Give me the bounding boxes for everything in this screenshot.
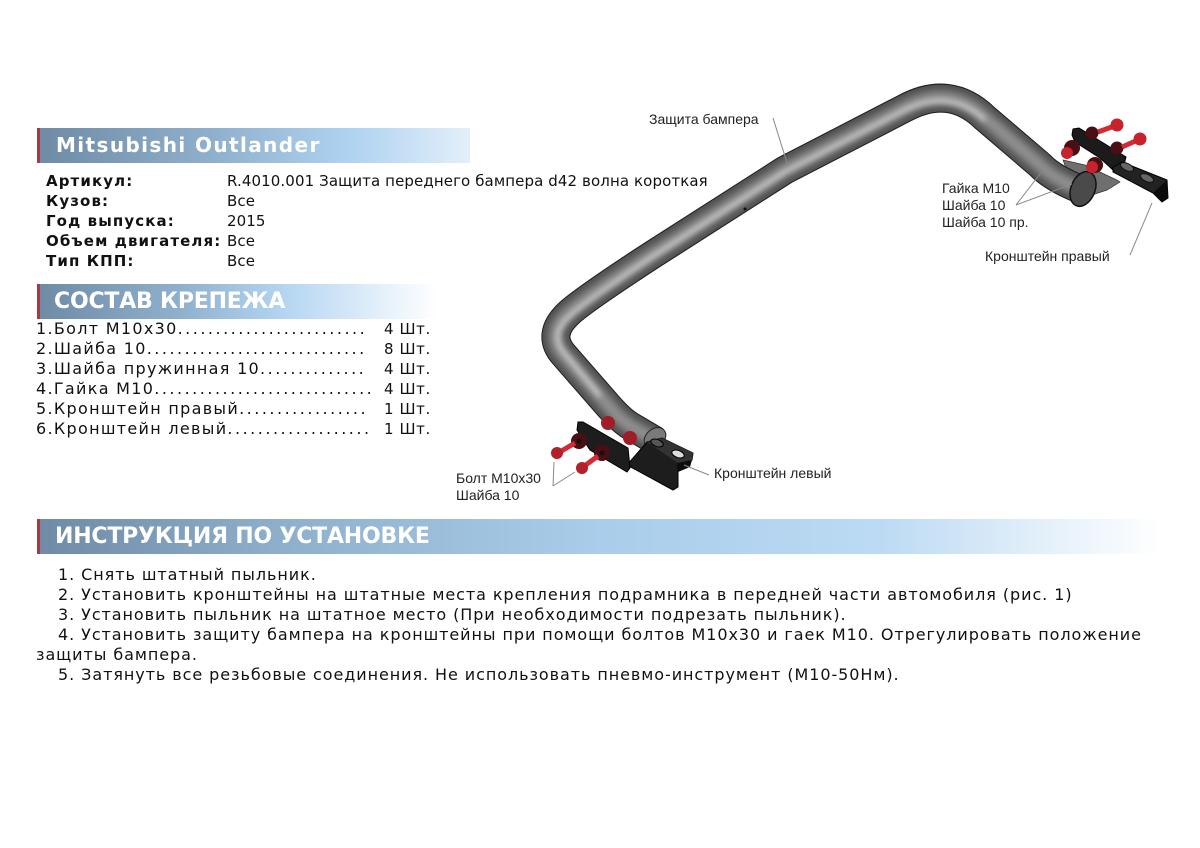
banner: vehicle: Mitsubishi Outlander: [56, 133, 321, 157]
vehicle specification labels: Артикул: Кузов: Год выпуска: Объем двигателя: Тип КПП:: [46, 172, 221, 270]
banner: fasteners: СОСТАВ КРЕПЕЖА: [54, 289, 285, 314]
right bracket with fasteners: [1061, 118, 1168, 202]
fastener quantities: 4 Шт. 8 Шт. 4 Шт. 4 Шт. 1 Шт. 1 Шт.: [384, 320, 431, 438]
banner: vehicle: [37, 128, 470, 163]
tube hole: [744, 208, 746, 210]
label: right bracket: Кронштейн правый: [985, 248, 1110, 264]
label: bumper guard: Защита бампера: [649, 111, 759, 127]
leader lines: [553, 118, 1152, 486]
banner: installation: ИНСТРУКЦИЯ ПО УСТАНОВКЕ: [55, 524, 430, 549]
label: right fasteners: Гайка М10 Шайба 10 Шайба 10 пр.: [942, 180, 1029, 230]
label: left bracket: Кронштейн левый: [714, 465, 831, 481]
left tube end: [640, 423, 670, 453]
bumper guard tube: [556, 98, 1082, 441]
tube end cap: [1065, 168, 1101, 210]
label: left fasteners: Болт М10х30 Шайба 10: [456, 470, 541, 503]
installation steps: 1. Снять штатный пыльник. 2. Установить кронштейны на штатные места крепления подрамника в передней части автомобиля (рис. 1) 3. Установить пыльник на штатное место (При необходимости подрезать пыльник). 4. Установить защиту бампера на кронштейны при помощи болтов М10х30 и гаек М10. Отрегулировать положение защиты бампера. 5. Затянуть все резьбовые соединения. Не использовать пневмо-инструмент (М10-50Нм).: [36, 565, 1142, 684]
right bracket rear plate: [1063, 160, 1120, 195]
fastener list: 1.Болт М10х30......................... 2.Шайба 10............................. 3.Шайба пружинная 10.............. 4.Гайка М10............................. 5.Кронштейн правый................. 6.Кронштейн левый...................: [36, 319, 374, 438]
vehicle specification values: R.4010.001 Защита переднего бампера d42 волна короткая Все 2015 Все Все: [227, 172, 708, 270]
banner: fasteners: [37, 284, 437, 319]
left bracket with fasteners: [551, 416, 693, 490]
banner: installation: [37, 519, 1160, 554]
